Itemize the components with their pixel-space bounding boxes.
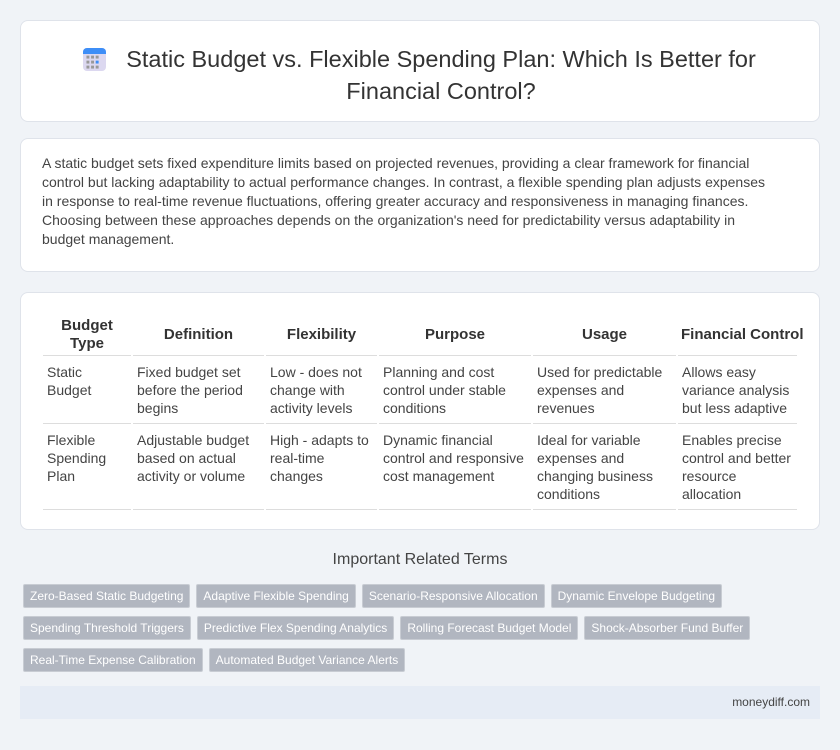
related terms tags xyxy=(23,584,750,672)
comparison table: Fixed budget set before the period begins xyxy=(137,364,243,416)
comparison table: Definition xyxy=(164,326,233,343)
comparison table: Financial Control xyxy=(681,326,804,343)
intro text xyxy=(20,138,820,272)
related terms heading: Important Related Terms xyxy=(333,551,507,568)
comparison table: Static Budget xyxy=(47,364,91,398)
comparison table: High - adapts to real-time changes xyxy=(270,432,369,484)
comparison table: Ideal for variable expenses and changing business conditions xyxy=(537,432,653,502)
related terms tags: Shock-Absorber Fund Buffer xyxy=(591,621,743,635)
related terms tags: Predictive Flex Spending Analytics xyxy=(204,621,387,635)
related terms tags: Spending Threshold Triggers xyxy=(30,621,184,635)
comparison table: Used for predictable expenses and revenues xyxy=(537,364,662,416)
related terms tags: Adaptive Flexible Spending xyxy=(203,589,349,603)
comparison table: Adjustable budget based on actual activity or volume xyxy=(137,432,249,484)
comparison table: Dynamic financial control and responsive cost management xyxy=(383,432,524,484)
comparison table: Flexible Spending Plan xyxy=(47,432,106,484)
header card xyxy=(20,20,820,122)
related terms tags: Dynamic Envelope Budgeting xyxy=(558,589,715,603)
comparison table: Flexibility xyxy=(287,326,356,343)
title: Static Budget vs. Flexible Spending Plan: Which Is Better for Financial Control? xyxy=(126,46,756,104)
footer xyxy=(20,686,820,719)
comparison table: Purpose xyxy=(425,326,485,343)
comparison table: Usage xyxy=(582,326,627,343)
related terms tags: Rolling Forecast Budget Model xyxy=(407,621,571,635)
icon: calendar: ■■■ xyxy=(86,55,100,61)
comparison table: Enables precise control and better resource allocation xyxy=(682,432,791,502)
comparison table: Low - does not change with activity levels xyxy=(270,364,362,416)
comparison table xyxy=(20,292,820,530)
related terms tags: Real-Time Expense Calibration xyxy=(30,653,196,667)
related terms tags: Zero-Based Static Budgeting xyxy=(30,589,183,603)
icon: calendar: ■■■ xyxy=(86,65,100,71)
icon: calendar xyxy=(83,48,106,71)
icon: calendar: ■■■ xyxy=(86,60,100,66)
comparison table: Allows easy variance analysis but less adaptive xyxy=(682,364,789,416)
intro text: A static budget sets fixed expenditure limits based on projected revenues, providing a clear framework for financial control but lacking adaptability to actual performance changes. In contrast, a flexible spending plan adjusts expenses in response to real-time revenue fluctuations, offering greater accuracy and responsiveness in managing finances. Choosing between these approaches depends on the organization's need for predictability versus adaptability in budget management. xyxy=(42,155,765,247)
related terms tags: Automated Budget Variance Alerts xyxy=(216,653,398,667)
comparison table: Planning and cost control under stable conditions xyxy=(383,364,506,416)
footer: moneydiff.com xyxy=(732,695,810,709)
comparison table: Budget Type xyxy=(61,317,113,352)
related terms tags: Scenario-Responsive Allocation xyxy=(369,589,538,603)
